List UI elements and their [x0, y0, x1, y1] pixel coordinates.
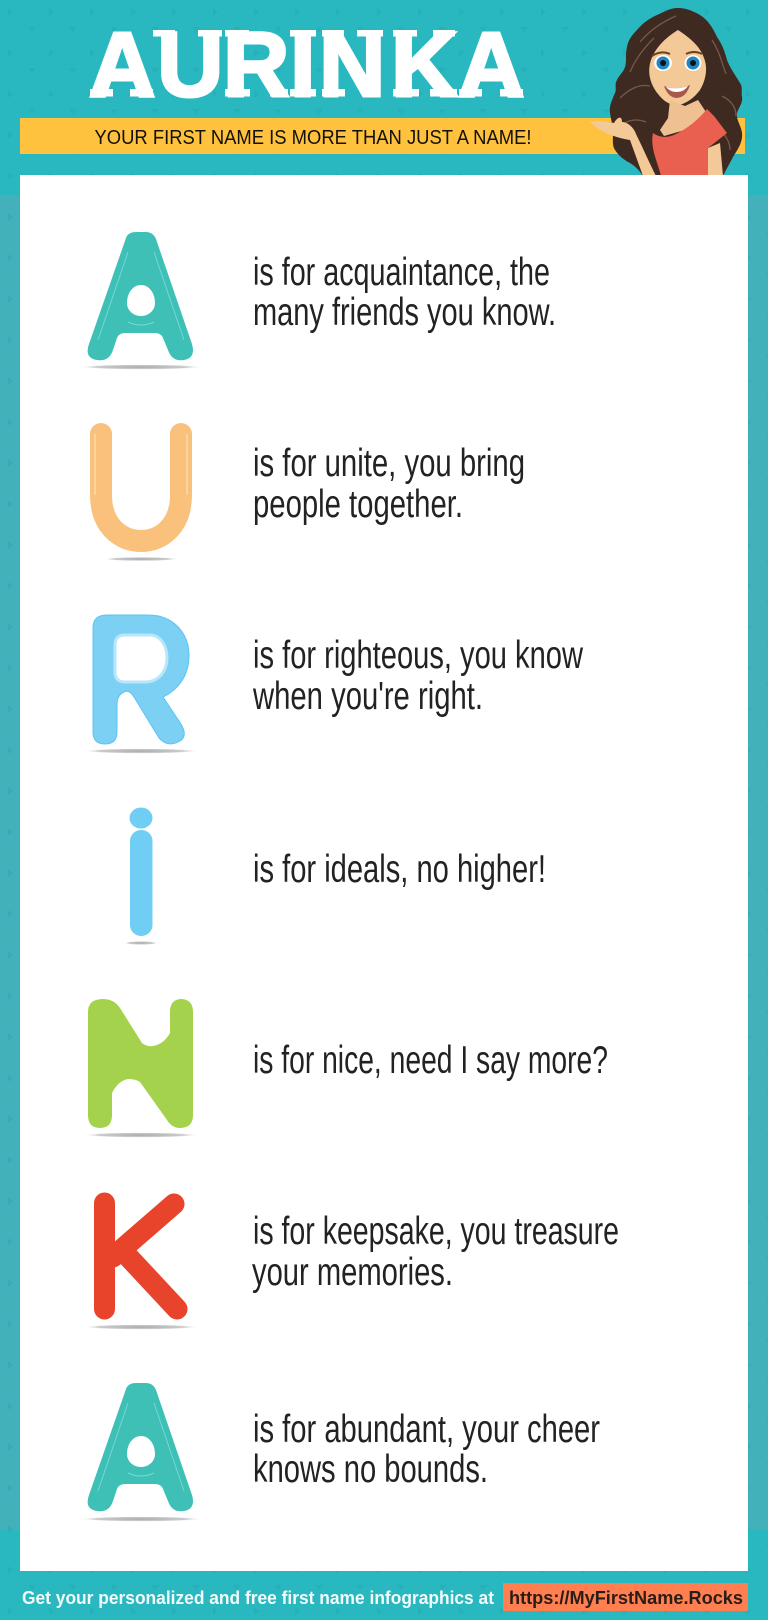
title: AURINKA — [89, 14, 524, 116]
text: keepsake: is for keepsake, you treasure — [253, 1210, 619, 1253]
text: ideals: is for ideals, no higher! — [253, 848, 546, 891]
text: abundant — [253, 1408, 600, 1491]
text: righteous: is for righteous, you know — [253, 634, 584, 677]
text: abundant: is for abundant, your cheer — [253, 1408, 600, 1451]
footer link badge: https://MyFirstName.Rocks — [509, 1588, 743, 1608]
footer link badge — [503, 1583, 748, 1611]
text: acquaintance: many friends you know. — [253, 291, 556, 334]
text: righteous: when you're right. — [252, 675, 483, 718]
subtitle banner — [20, 118, 745, 154]
text: unite — [253, 442, 525, 526]
letter i — [124, 808, 158, 945]
letter K — [83, 1203, 199, 1330]
text: keepsake: your memories. — [252, 1251, 453, 1294]
text: abundant: knows no bounds. — [253, 1448, 488, 1491]
footer text: Get your personalized and free first name infographics at — [22, 1588, 494, 1608]
text: keepsake — [252, 1210, 619, 1294]
text: unite: is for unite, you bring — [253, 442, 525, 485]
letter A second — [79, 1383, 203, 1522]
icon: cartoon woman — [590, 8, 742, 176]
text: unite: people together. — [253, 483, 463, 526]
text: righteous — [252, 634, 584, 718]
text: nice: is for nice, need I say more? — [253, 1039, 608, 1082]
letter A — [79, 232, 203, 370]
text: acquaintance — [253, 251, 556, 334]
subtitle banner: YOUR FIRST NAME IS MORE THAN JUST A NAME! — [94, 126, 532, 149]
letter R — [83, 615, 199, 754]
letter N — [83, 999, 199, 1138]
text: acquaintance: is for acquaintance, the — [253, 251, 550, 294]
letter U — [95, 434, 187, 561]
